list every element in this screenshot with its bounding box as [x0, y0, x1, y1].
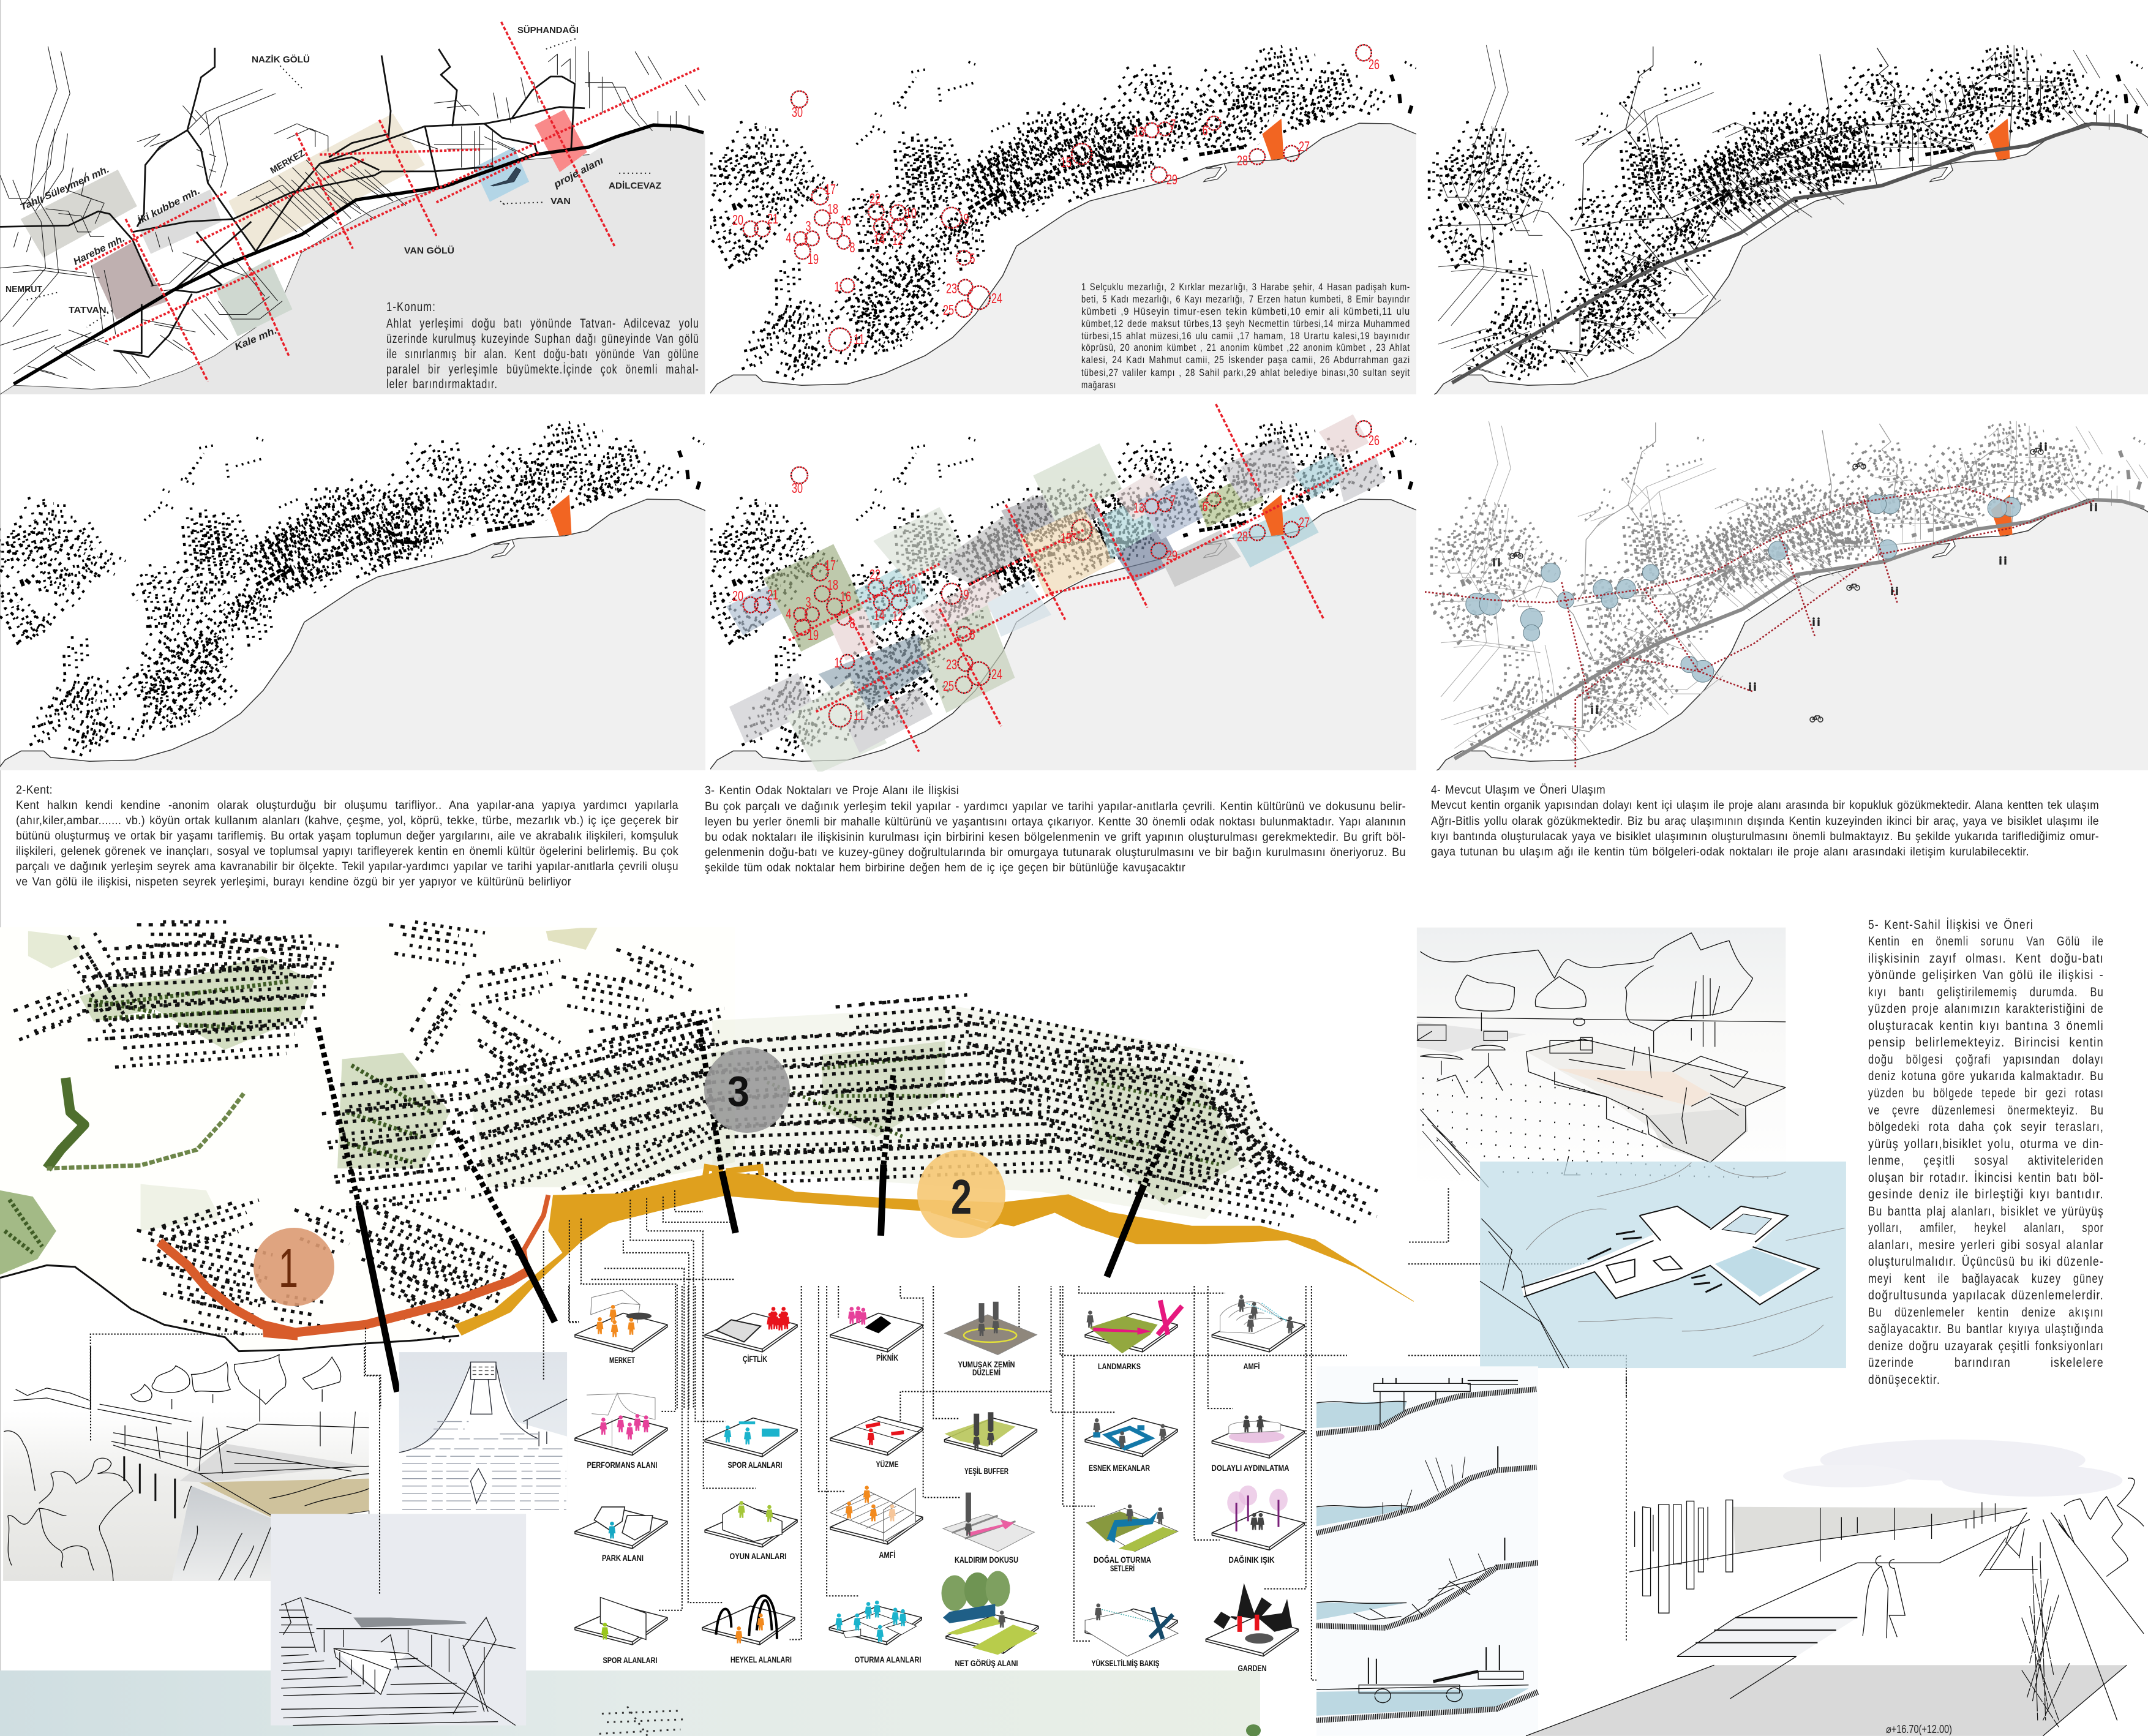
map place labels: ADİLCEVAZ: [609, 181, 661, 191]
aerial vegetation base: [0, 927, 735, 1351]
zone marker 2: 2: [951, 1170, 972, 1224]
text: 3 focal points: 3- Kentin Odak Noktaları ve Proje Alanı ile İlişkisi: [705, 783, 959, 797]
icon: doğal oturma: [1087, 1505, 1178, 1552]
text: 5 coast relation: doğrultusunda yapılacak düzenlemelerdir.: [1868, 1288, 2104, 1302]
icon: landmarks: [1085, 1300, 1182, 1353]
text: 5 coast relation: pensip belirlemekteyiz. Birincisi kentin: [1868, 1035, 2104, 1050]
panel: aerial view of coast: [0, 922, 1414, 1392]
text: 4 transport: kıyı bantında oluşturulacak yaya ve bisiklet ulaşımının oluşturulmasını önemli bulmaktayız. Bu şekilde yukarıda tariflediğimiz omur-: [1431, 830, 2099, 843]
text: 5 coast relation: lenme, çeşitli sosyal aktiviteleriden: [1868, 1154, 2104, 1168]
map place labels: Harebe mh.: [72, 233, 127, 268]
icon: yesil buffer: [944, 1412, 1037, 1457]
icon labels: HEYKEL ALANLARI: [730, 1655, 792, 1664]
text: monuments legend: 1 Selçuklu mezarlığı, 2 Kırklar mezarlığı, 3 Harabe şehir, 4 Hasan padişah kum-: [1081, 282, 1410, 293]
road network lake and buildings: [1429, 47, 2148, 394]
focal zone base: [703, 423, 1451, 770]
transport base map: [1432, 423, 2148, 770]
panel: 4 transport map: [1425, 421, 2148, 770]
aerial east vegetation: [712, 1007, 1274, 1219]
icon: amfi: [830, 1486, 923, 1544]
focal zone coloured rectangles: [726, 415, 1385, 773]
map place labels: İki kubbe mh.: [136, 186, 202, 227]
text: monuments legend: kümbeti ,9 Hüseyin timur-esen tekin kümbeti,10 emir ali kümbeti,11 ulu: [1081, 306, 1410, 317]
text: 5 coast relation: üzerinde: [1868, 1356, 1914, 1370]
panel: 2-Kent settlement map: [0, 423, 738, 770]
zone marker 1: 1: [279, 1238, 298, 1299]
map place labels: NEMRUT: [6, 284, 42, 295]
text: 5 coast relation: oluşan bir rotadır. İkincisi kentin batı böl-: [1868, 1171, 2104, 1185]
icon: park: [575, 1507, 667, 1549]
icon labels: PERFORMANS ALANI: [587, 1460, 658, 1470]
aerial buildings: [13, 922, 1382, 1341]
text: 2-Kent: [16, 783, 678, 889]
text: 1-Konum: paralel bir yerleşimle büyümekte.İçinde çok önemli mahal-: [386, 363, 699, 377]
text: monuments legend: köprüsü, 20 anonim kümbet , 21 anonim kümbet ,22 anonim kümbet , 23 Ahlat: [1081, 342, 1410, 353]
text: 1-Konum: ile sınırlanmış bir alan. Kent doğu-batı yönünde Van gölüne: [386, 347, 699, 361]
text: 5 coast relation: oluşturulmalıdır. Üçüncüsü bu iki düzenle-: [1868, 1255, 2104, 1269]
map place labels: Tahlı Süleymen mh.: [19, 164, 111, 213]
dotted connectors: [91, 1145, 1626, 1680]
map place labels: VAN: [550, 196, 571, 206]
icon labels: LANDMARKS: [1098, 1361, 1141, 1371]
sketch: blue pier plan: [1480, 1162, 1846, 1368]
text: 3 focal points: Bu çok parçalı ve dağınık yerleşim tekil yapılar - yardımcı yapılar ve tarihi yapılar-anıtlarla çevrili. Kentin kültürünü ve dokusunu belir-: [705, 800, 1406, 813]
panel: isometric programme icons: [575, 1290, 1304, 1673]
icon labels: DÜZLEMİ: [972, 1367, 1001, 1377]
text: 1-Konum: Ahlat yerleşimi doğu batı yönünde Tatvan- Adilcevaz yolu: [386, 317, 699, 331]
text: 5 coast relation: bölgedeki rota daha çok seyir terasları,: [1868, 1120, 2104, 1134]
icon labels: YEŞİL BUFFER: [964, 1466, 1008, 1476]
transport stops and routes: [1425, 486, 2096, 767]
text: 2-Kent: Kent halkın kendi kendine -anonim olarak oluşturduğu bir oluşumu tarifliyor.. Ana yapılar-ana yapıya yardımcı yapılarla: [16, 798, 678, 812]
icon labels: GARDEN: [1238, 1663, 1266, 1673]
text: 1-Konum: üzerinde kurulmuş kuzeyinde Suphan dağı güneyinde Van gölü: [386, 332, 699, 346]
text: 5 coast relation: barındıran: [1955, 1356, 2011, 1370]
text: monuments legend: tübesi,27 valiler kampı , 28 Sahil parkı,29 ahlat belediye binası,30 sultan seyit: [1081, 367, 1410, 378]
icon: performans: [575, 1392, 667, 1456]
map place labels: [6, 24, 661, 353]
icon labels: AMFİ: [879, 1550, 895, 1560]
text: 3 focal points: şekilde tüm odak noktalar hem birbirine değen hem de iç içe geçen bir bütünlüğe kavuşacaktır: [705, 861, 1185, 874]
text: 2-Kent: ve Van gölü ile ilişkisi, nispeten seyrek yerleşimi, burayı kendine özgü bir yer yapıyor ve kültürünü belirliyor: [16, 875, 571, 889]
icon labels: KALDIRIM DOKUSU: [955, 1555, 1018, 1565]
text: 1-Konum: 1-Konum:: [386, 300, 436, 314]
text: 5 coast relation: dönüşecektir.: [1868, 1373, 1940, 1387]
text: 2-Kent: ilişkileri, gelenek görenek ve inançları, sosyal ve toplumsal yapıyı tarifleyerek kentin en önemli kültür ögelerini belirlemiş. Bu çok: [16, 844, 678, 858]
text: 5 coast relation: gesinde deniz ile birleştiği kıyı bantıdır.: [1868, 1187, 2104, 1201]
icon: ciftlik: [705, 1307, 797, 1352]
map place labels: proje alanı: [552, 155, 606, 190]
icon: oyun: [705, 1501, 797, 1547]
icon: oturma: [829, 1601, 922, 1645]
icon: net gorus: [942, 1571, 1038, 1655]
map place labels: TATVAN.: [69, 305, 109, 315]
text: 5 coast relation: denize doğru uzayarak çeşitli fonksiyonları: [1868, 1339, 2104, 1353]
icon: garden: [1206, 1583, 1298, 1656]
location map drawing: [0, 22, 712, 394]
panel: 1 location map: [0, 22, 712, 394]
icon labels: OYUN ALANLARI: [730, 1551, 786, 1561]
text: 1-Konum: [386, 300, 699, 391]
text: 5 coast relation: oluşturacak kentin kıyı bantına 3 önemli: [1868, 1019, 2104, 1033]
text: 1-Konum: leler barındırmaktadır.: [386, 377, 498, 391]
text: monuments legend: kümbet,12 dede maksut türbes,13 şeyh Necmettin türbesi,14 mirza Muhammed: [1081, 318, 1410, 329]
icon labels: DAĞINIK IŞIK: [1228, 1554, 1275, 1565]
map place labels: MERKEZ: [268, 148, 307, 176]
icon: yuzme: [830, 1416, 923, 1456]
text: monuments legend: türbesi,15 ahlat müzesi,16 ulu camii ,17 hamam, 18 Urartu kalesi,19 bayınıdır: [1081, 331, 1410, 342]
icon labels: MERKET: [609, 1355, 635, 1365]
tree at sky edge: [1246, 1724, 1261, 1736]
icon labels: PARK ALANI: [602, 1553, 644, 1563]
dotted connector promenade: [1626, 1378, 1627, 1641]
icon tiles and figures: [575, 1290, 1304, 1656]
coastal band east: [705, 1167, 1414, 1301]
focal points drawing: [703, 45, 1451, 394]
text: 3 focal points: gelenmenin doğu-batı ve kuzey-güney doğrultularında bir omurgaya tutunarak oluşturulmasını ve bir bağın kurulmasını öneriyoruz. Bu: [705, 846, 1406, 859]
map place labels: SÜPHANDAĞI: [517, 24, 579, 36]
icon: dağınık ışık: [1212, 1486, 1304, 1550]
icon labels: NET GÖRÜŞ ALANI: [955, 1658, 1018, 1668]
focal point numbers: [732, 56, 1380, 347]
text: 2-Kent: parçalı ve dağınık yerleşim seyrek ama kavranabilir bir ölçekte. Tekil yapılar-yardımcı yapılar ve tarihi yapılar-anıtlarla çevrili oluşu: [16, 860, 678, 873]
icon labels: DOĞAL OTURMA: [1094, 1554, 1151, 1565]
focal zone numbers: [732, 432, 1380, 723]
text: 5 coast relation: Bu bantta plaj alanları, bisiklet ve yürüyüş: [1868, 1204, 2104, 1219]
text: 4 transport: 4- Mevcut Ulaşım ve Öneri Ulaşım: [1431, 783, 1605, 797]
icon labels: ÇİFTLİK: [743, 1354, 767, 1364]
text: 4 transport: Ağrı-Bitlis yollu olarak gözükmektedir. Biz bu araç ulaşımının dışında Kentin kuzeyinden ikinci bir araç, yaya ve bisiklet ulaşımı ile: [1431, 814, 2099, 828]
icon: esnek mekanlar: [1085, 1418, 1177, 1457]
icon labels: YÜKSELTİLMİŞ BAKIŞ: [1091, 1658, 1160, 1668]
text: 4 transport: [1431, 783, 2099, 859]
text: 5 coast relation: ilişkisinin zayıf olması. Kent doğu-batı: [1868, 952, 2104, 966]
zone marker 3: [704, 1047, 790, 1133]
route markers: thick dashed and solid stakes: [318, 1021, 1196, 1392]
text: 3 focal points: [705, 783, 1406, 874]
focal zone orange plot and circles: [743, 421, 1372, 727]
icon labels: [587, 1353, 1290, 1673]
sketch: stair viewing deck: [271, 1514, 526, 1726]
map place labels: Kale mh.: [233, 326, 279, 353]
icon labels: YÜZME: [876, 1459, 899, 1469]
zone marker 1: [253, 1228, 334, 1306]
icon: piknik: [830, 1306, 923, 1352]
text: 2-Kent: 2-Kent:: [16, 783, 53, 797]
icon: yükseltilmiş bakış: [1085, 1603, 1178, 1656]
icon labels: YUMUŞAK ZEMİN: [958, 1359, 1015, 1369]
text: 4 transport: gaya tutunan bu ulaşım ağı ile kentin tüm bölgeleri-odak noktaları ile proje alanı arasındaki iletişim kurulabilecektir.: [1431, 845, 2029, 859]
icon labels: PİKNİK: [876, 1353, 898, 1362]
sketch: promenade perspective: [1526, 1440, 2144, 1736]
panel: 2 focal points map: [703, 45, 1451, 394]
text: monuments legend: mağarası: [1081, 380, 1116, 391]
icon: dolayli aydinlatma: [1212, 1415, 1304, 1458]
transport roads: [1441, 421, 2148, 759]
panel: 3 focal zones map: [703, 404, 1451, 773]
panel: 3 road network map: [1429, 45, 2148, 394]
icon: spor: [575, 1598, 667, 1645]
birds in sky: [599, 1707, 683, 1736]
icon labels: DOLAYLI AYDINLATMA: [1211, 1463, 1290, 1473]
icon labels: OTURMA ALANLARI: [855, 1655, 921, 1664]
text: 3 focal points: bu odak noktaları ile ilişkisinin kurulması için birbirini kesen bölgelenmenin ve grift yapının oluşturulması gerekmektedir. Bu grift böl-: [705, 830, 1406, 844]
text: 5 coast relation: yürüş yolları,bisiklet yolu, oturma ve din-: [1868, 1137, 2104, 1151]
text: monuments legend: beti, 5 Kadı mezarlığı, 6 Kayı mezarlığı, 7 Erzen hatun kumbeti, 8 Emir bayındır: [1081, 294, 1410, 305]
icon labels: SPOR ALANLARI: [727, 1460, 783, 1470]
text: 5 coast relation: iskelelere: [2051, 1356, 2104, 1370]
text: 5 coast relation: yönünde gelişirken Van gölü ile ilişkisi -: [1868, 968, 2104, 982]
text: 5 coast relation: yüzden proje alanımızın karakteristiğini de: [1868, 1002, 2104, 1016]
text: 2-Kent: bütünü oluşturmuş ve ortak bir yaşamı tariflemiş. Bu ortak yaşam toplumun değer yargılarını, aile ve akrabalık ilişkileri, komşuluk: [16, 829, 678, 843]
icon: heykel: [702, 1596, 795, 1645]
icon: merket: [575, 1290, 667, 1352]
coastal bands: [0, 1168, 735, 1351]
elevation mark: ⌀+16.70(+12.00): [1886, 1723, 1952, 1735]
text: 2-Kent: (ahır,kiler,ambar....... vb.) köyün ortak kullanım alanları (kahve, çeşme, yol, köprü, tekke, türbe, mezarlık vb.) iç içe geçerek bir: [16, 814, 678, 827]
icon: amfi 2: [1212, 1295, 1304, 1352]
map place labels: NAZİK GÖLÜ: [252, 54, 310, 65]
text: 5 coast relation: 5- Kent-Sahil İlişkisi ve Öneri: [1868, 918, 2033, 932]
zone marker 2: [917, 1150, 1005, 1238]
icon labels: ESNEK MEKANLAR: [1089, 1463, 1150, 1473]
sky band at bottom: [0, 1670, 1260, 1736]
text: 5 coast relation: [1868, 918, 2104, 1387]
text: monuments legend: kalesi, 24 Kadı Mahmut camii, 25 İskender paşa camii, 26 Abdurrahman gazi: [1081, 354, 1410, 366]
text: 5 coast relation: alanları, mesire yerleri gibi sosyal alanlar: [1868, 1238, 2104, 1252]
zone marker 3: 3: [727, 1067, 749, 1115]
text: 3 focal points: leyen bu yerler önemli bir mahalle kültürünü ve yaşantısını ortaya çıkarıyor. Kentte 30 önemli odak noktası bulunmaktadır. Yapı alanının: [705, 815, 1406, 829]
icon labels: SPOR ALANLARI: [603, 1655, 658, 1665]
sketch: stepped terraces: [1417, 928, 1786, 1187]
map place labels: VAN GÖLÜ: [404, 246, 454, 256]
sketch: pier photo: [399, 1352, 567, 1513]
road network lines: [1438, 45, 2148, 383]
icons: bicycles and pedestrians: [1493, 442, 2097, 722]
icon labels: SETLERİ: [1110, 1563, 1135, 1573]
icon: spor alanlari: [705, 1418, 797, 1457]
focal zone red dotted axes: [789, 404, 1403, 751]
icon: kaldirim: [943, 1493, 1034, 1552]
sketches: shoreline sections: [1316, 1366, 1538, 1736]
text: monuments legend: [1081, 282, 1410, 391]
icon labels: AMFİ: [1243, 1361, 1260, 1371]
sketch: waterfall terrace: [3, 1355, 369, 1581]
icon: yumusak zemin: [944, 1302, 1037, 1355]
